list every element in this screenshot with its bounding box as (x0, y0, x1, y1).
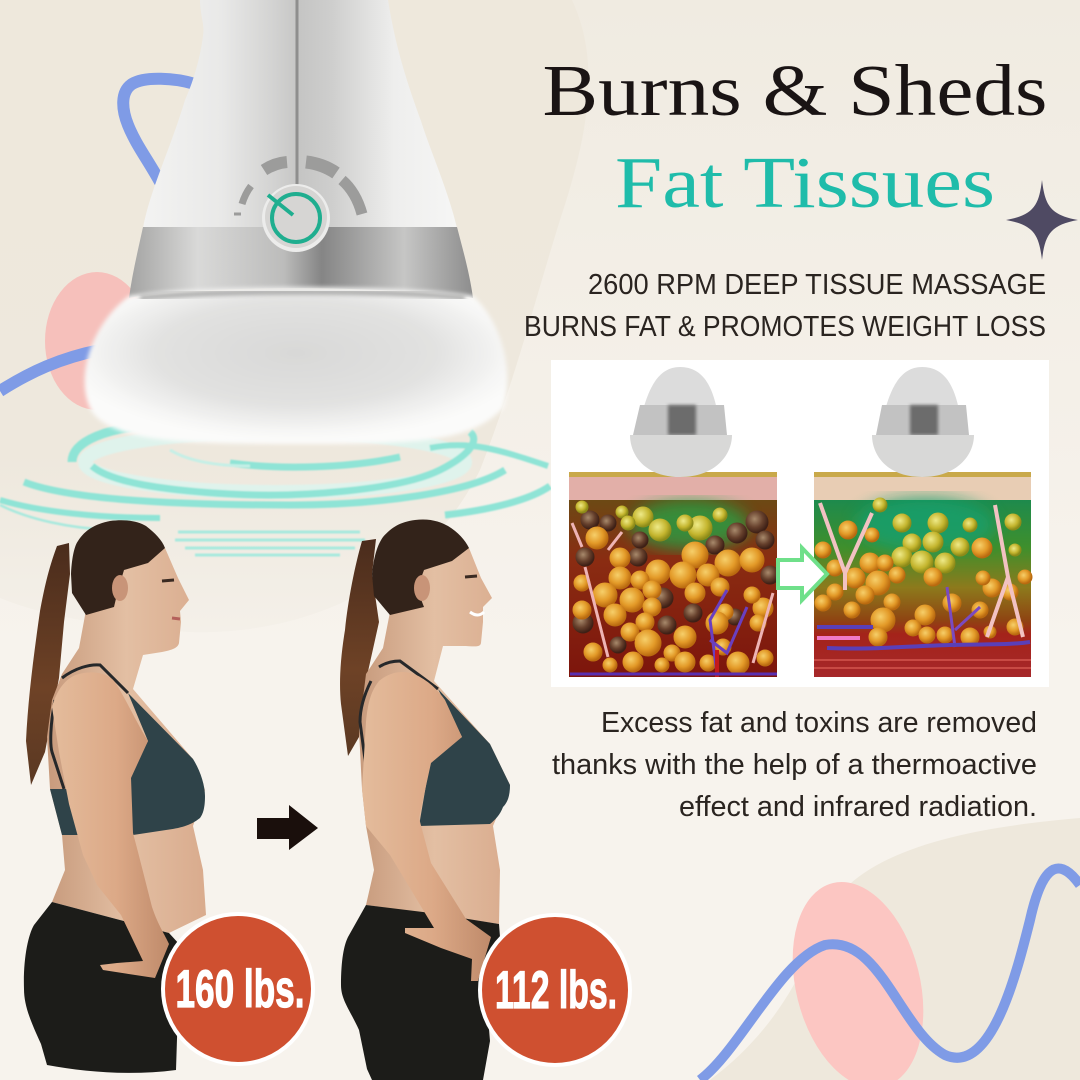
icon: sparkle (1006, 180, 1078, 260)
title: Burns & Sheds (542, 50, 1048, 131)
ponytail (26, 543, 70, 785)
before mini device (630, 367, 732, 477)
bra straps (360, 661, 438, 767)
after mini device (872, 367, 974, 477)
dial (234, 162, 362, 252)
shorts (341, 905, 500, 1080)
hair cap (71, 520, 165, 615)
subheading: 2600 RPM DEEP TISSUE MASSAGE (588, 269, 1046, 301)
bra straps (51, 665, 128, 789)
eye (162, 580, 174, 581)
sports bra (50, 693, 205, 835)
ponytail (340, 539, 379, 756)
arm (52, 672, 169, 978)
after tissue block (814, 472, 1031, 677)
ripple rings (0, 425, 550, 555)
eye (465, 576, 477, 577)
ear (112, 575, 128, 601)
badge: 112 lbs: 112 lbs. (495, 961, 617, 1020)
massager device (85, 0, 507, 444)
badge: 160 lbs (163, 914, 313, 1064)
sports bra (419, 689, 510, 826)
hair cap (372, 519, 469, 615)
subheading: BURNS FAT & PROMOTES WEIGHT LOSS (524, 311, 1046, 343)
panel: before and after tissue diagram (551, 360, 1049, 687)
description text: Excess fat and toxins are removed (601, 707, 1037, 739)
arrow: before to after (257, 805, 318, 850)
badge: 112 lbs (480, 915, 630, 1065)
silver band (129, 227, 473, 298)
fluffy head (85, 287, 507, 444)
title: Fat Tissues (615, 142, 995, 223)
after figure (340, 519, 510, 1080)
lips (172, 618, 180, 619)
torso skin (47, 535, 206, 933)
title (542, 50, 1048, 223)
description text: effect and infrared radiation. (679, 791, 1037, 823)
description text (552, 707, 1037, 823)
smile (470, 612, 484, 615)
arm (362, 672, 491, 981)
device body (143, 0, 457, 228)
description text: thanks with the help of a thermoactive (552, 749, 1037, 781)
badge: 160 lbs: 160 lbs. (176, 960, 304, 1019)
ear (414, 575, 430, 601)
subheading (524, 269, 1046, 343)
arrow: before to after (778, 548, 827, 600)
before tissue block (569, 472, 778, 677)
shorts (24, 902, 180, 1073)
before figure (24, 520, 206, 1073)
torso skin (359, 532, 510, 924)
